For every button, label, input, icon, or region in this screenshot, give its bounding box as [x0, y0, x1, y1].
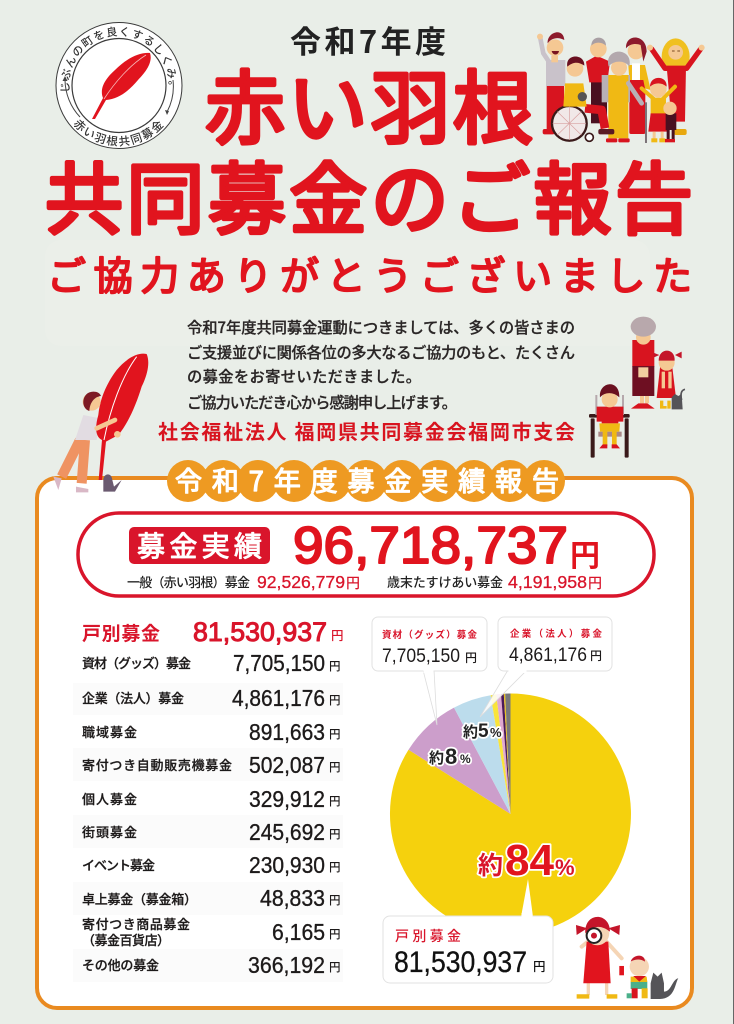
girl in red — [653, 351, 682, 409]
baby — [663, 102, 677, 142]
organisation name: 社会福祉法人 福岡県共同募金会福岡市支会 — [158, 416, 575, 445]
thank-you heading: ご協力ありがとうございました — [47, 246, 692, 302]
callout: goods: 円 — [465, 649, 477, 666]
cat — [672, 394, 683, 409]
row: vending machines: 寄付つき自動販売機募金 — [82, 755, 232, 774]
row: goods with donation: 円 — [329, 926, 340, 942]
wheelchair with seated boy — [552, 57, 614, 141]
row: goods: 円 — [329, 658, 340, 674]
row: vending machines: 円 — [329, 759, 340, 775]
pie label: 8%: 8 — [445, 744, 457, 769]
callout: corporate: 企業（法人）募金 — [510, 626, 602, 640]
row: street: 円 — [329, 826, 340, 842]
row: table box: 卓上募金（募金箱） — [82, 889, 197, 908]
pie label: 84%: 約 — [478, 846, 503, 882]
main title line 1: 赤い羽根 — [205, 45, 533, 161]
girl — [576, 917, 622, 999]
baby with blocks — [627, 956, 649, 998]
row: door to door: 円 — [331, 625, 344, 644]
illustration: girl with magnifier, baby and cat — [576, 917, 678, 999]
row: door to door — [82, 617, 344, 647]
row: other: 366,192 — [248, 952, 325, 978]
blond woman with raised arms — [647, 38, 705, 135]
greeting text block: 令和7年度共同募金運動につきましては、多くの皆さまの — [187, 316, 575, 338]
year heading: 令和7年度 — [290, 17, 446, 62]
total amount pill: 円 — [588, 573, 602, 593]
row: corporate: 4,861,176 — [232, 685, 325, 711]
illustration: family group — [537, 32, 705, 143]
row: individual: 個人募金 — [82, 789, 137, 808]
label: total — [129, 527, 270, 564]
row: event: イベント募金 — [82, 855, 155, 874]
pie label: 84%: % — [555, 855, 575, 880]
row: individual: 329,912 — [249, 786, 325, 812]
pie label: 5% — [463, 721, 502, 742]
row: workplace: 職域募金 — [82, 722, 137, 741]
large red feather — [96, 354, 148, 480]
row: other: 円 — [329, 959, 340, 975]
callout: door to door: 戸別募金 — [395, 926, 461, 946]
row: vending machines: 502,087 — [249, 752, 325, 778]
callout: corporate: 円 — [590, 647, 602, 664]
callout: goods — [372, 617, 487, 725]
row: goods: 7,705,150 — [233, 650, 325, 676]
pie label: 84% — [478, 836, 575, 885]
woman with yellow jacket — [626, 37, 651, 134]
greeting text block: ご協力いただき心から感謝申し上げます。 — [187, 391, 457, 413]
small cat — [103, 474, 122, 492]
row: door to door: 81,530,937 — [193, 617, 327, 647]
greeting text block — [187, 316, 575, 413]
pie chart — [390, 694, 631, 935]
man waving — [537, 32, 568, 134]
pie label: 8%: 約 — [429, 747, 444, 768]
little girl — [642, 78, 675, 142]
callout: door to door: 円 — [533, 956, 546, 975]
total amount pill — [78, 513, 654, 596]
row: goods — [82, 650, 340, 676]
row: goods with donation: （募金百貨店） — [82, 930, 170, 949]
callout: corporate: 4,861,176 — [509, 644, 587, 666]
pie label: 5%: % — [490, 725, 502, 740]
row: goods with donation: 寄付つき商品募金 — [82, 914, 190, 933]
section heading pill — [167, 460, 565, 502]
total amount pill: 歳末たすけあい募金 — [387, 572, 503, 591]
illustration: grandmother, girl, wheelchair child and cat — [589, 317, 685, 458]
woman legs — [62, 440, 85, 483]
cat — [651, 973, 678, 999]
wheelchair child — [589, 384, 630, 458]
logo feather — [92, 53, 151, 119]
total amount pill: 4,191,958 — [508, 572, 587, 592]
grandmother — [602, 52, 647, 143]
slice: door to door 84% — [390, 694, 631, 935]
red card — [619, 966, 624, 975]
row: corporate: 円 — [329, 692, 340, 708]
main title line 2: 共同募金のご報告 — [45, 138, 693, 250]
row: event: 230,930 — [249, 852, 325, 878]
pie label: 8% — [429, 744, 471, 769]
total amount pill: 募金実績 — [137, 525, 262, 565]
row: workplace — [82, 719, 340, 745]
callout: corporate — [480, 617, 612, 717]
grandmother — [631, 317, 656, 409]
row: workplace: 円 — [329, 726, 340, 742]
callout: door to door — [383, 879, 553, 983]
greeting text block: ご支援並びに関係各位の多大なるご協力のもと、たくさん — [187, 341, 575, 363]
row: event: 円 — [329, 859, 340, 875]
illustration: woman hugging feather with cat — [53, 354, 148, 492]
row: street: 245,692 — [249, 819, 325, 845]
row: corporate — [82, 685, 340, 711]
row: goods with donation — [82, 914, 340, 949]
slice: goods 8% — [408, 708, 510, 814]
pie label: 8%: % — [460, 752, 471, 766]
row: table box: 48,833 — [260, 885, 325, 911]
row: street — [82, 819, 340, 845]
pie label: 5%: 5 — [478, 721, 489, 742]
row: goods with donation: 6,165 — [272, 919, 325, 945]
heading text: 令和7年度募金実績報告 — [175, 460, 559, 499]
row: door to door: 戸別募金 — [82, 619, 160, 646]
row: vending machines — [82, 752, 340, 778]
results panel — [37, 478, 692, 1008]
greeting text block: の募金をお寄せいただきました。 — [187, 365, 421, 387]
logo: red feather badge: 赤い羽根共同募金 — [74, 120, 164, 147]
row: individual: 円 — [329, 793, 340, 809]
callout: goods: 7,705,150 — [382, 645, 460, 667]
row: event — [82, 852, 340, 878]
callout: goods: 資材（グッズ）募金 — [382, 627, 477, 641]
logo: red feather badge: じぶんの町を良くするしくみ。 — [60, 26, 176, 91]
logo: red feather badge — [56, 22, 182, 149]
pie label: 84%: 84 — [505, 836, 555, 885]
row: other: その他の募金 — [82, 955, 159, 974]
callout: door to door: 81,530,937 — [394, 946, 527, 979]
row: individual — [82, 786, 340, 812]
row: table box — [82, 885, 340, 911]
total amount pill: 円 — [570, 531, 600, 575]
breakdown: 一般（赤い羽根）募金 — [127, 572, 250, 591]
row: table box: 円 — [329, 892, 340, 908]
pie label: 5%: 約 — [463, 721, 478, 742]
small slices — [491, 694, 510, 814]
total amount pill: 円 — [346, 573, 360, 593]
grey-haired man — [586, 38, 610, 123]
total amount pill: 92,526,779 — [257, 572, 345, 592]
row: corporate: 企業（法人）募金 — [82, 688, 184, 707]
row: street: 街頭募金 — [82, 822, 137, 841]
row: workplace: 891,663 — [249, 719, 325, 745]
row: other — [82, 952, 340, 978]
total amount: 96,718,737 — [293, 517, 568, 575]
row: goods: 資材（グッズ）募金 — [82, 653, 191, 672]
slice: corporate 5% — [454, 695, 510, 814]
table of donation categories — [73, 617, 344, 982]
